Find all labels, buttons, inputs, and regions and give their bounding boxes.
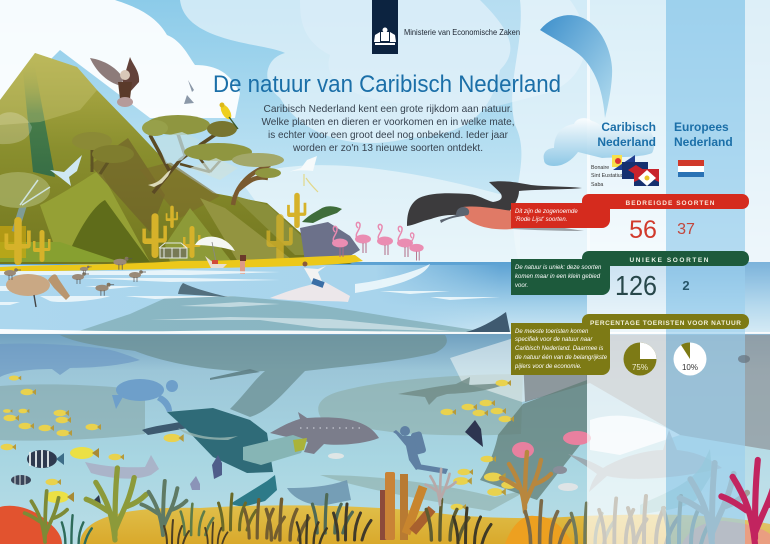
note text	[515, 209, 578, 223]
umbrella and sunbathers	[195, 237, 246, 274]
trees	[0, 115, 284, 232]
rijksoverheid logo	[372, 0, 398, 54]
flag: Netherlands	[678, 160, 704, 177]
whale shark silhouette	[0, 343, 140, 377]
reef sharks	[398, 377, 722, 492]
island labels	[591, 165, 624, 188]
eagle	[90, 57, 139, 107]
cloud near columns	[544, 118, 654, 166]
flag: Saba	[634, 169, 659, 186]
reef floor	[80, 505, 770, 544]
underwater background	[0, 333, 770, 544]
note text: De natuur is uniek: deze soorten	[515, 265, 602, 271]
title: De natuur van Caribisch Nederland	[213, 71, 561, 98]
stingray	[287, 480, 351, 506]
column veil: right margin	[745, 0, 770, 544]
note text: Dit zijn de zogenoemde	[515, 209, 578, 215]
whale above water	[70, 296, 500, 334]
note text: de natuur één van de belangrijkste	[515, 355, 608, 361]
wreck	[640, 449, 712, 515]
banner text: UNIEKE SOORTEN	[630, 257, 709, 264]
banner text: BEDREIGDE SOORTEN	[626, 200, 715, 207]
fish at right edge	[738, 355, 750, 363]
island labels: Saba	[591, 182, 603, 188]
cacti	[4, 193, 306, 265]
island labels: Sint Eustatius	[591, 173, 624, 179]
intro text: Caribisch Nederland kent een grote rijkdom aan natuur.	[264, 103, 512, 115]
clouds	[0, 0, 590, 265]
sponges	[380, 472, 435, 540]
spoonbill and waders	[4, 257, 146, 307]
yellow bird	[219, 102, 238, 129]
note text: pijlers voor de economie.	[514, 364, 582, 370]
flag: Bonaire	[612, 155, 635, 170]
column veil: Europees Nederland	[666, 0, 745, 544]
note text: komen maar in een klein gebied	[515, 274, 601, 280]
seaweed and corals	[25, 452, 747, 544]
big grey shape right	[450, 335, 770, 500]
number: 37: 37	[677, 221, 695, 238]
note text	[514, 329, 608, 370]
note text: De meeste toeristen komen	[515, 329, 589, 335]
pie chart: 10%: 10%	[682, 363, 698, 372]
note text: specifiek voor de natuur naar	[515, 337, 593, 343]
note text	[515, 265, 602, 289]
panel: unieke soorten	[511, 251, 749, 301]
striped fish	[11, 450, 102, 509]
sky background	[0, 0, 770, 265]
panel: bedreigde soorten	[511, 194, 749, 244]
small silver fish	[328, 453, 578, 491]
house	[159, 243, 187, 258]
beach	[0, 255, 363, 272]
number: 2: 2	[682, 278, 690, 293]
white waterline	[0, 329, 770, 334]
kite	[540, 15, 612, 118]
note text: voor.	[515, 283, 528, 289]
note text: Caribisch Nederland. Daarmee is	[515, 346, 603, 352]
orange mound	[505, 516, 573, 544]
hummingbird	[50, 155, 82, 186]
small birds	[184, 80, 202, 104]
column heading: Europees Nederland: Europees	[674, 120, 729, 134]
column heading: Europees Nederland: Nederland	[674, 135, 733, 149]
rocks	[300, 222, 360, 262]
intro text: is echter voor een groot deel nog onbekend. Ieder jaar	[268, 129, 508, 141]
diver	[393, 426, 448, 474]
tropicbird	[285, 156, 318, 192]
banner text: PERCENTAGE TOERISTEN VOOR NATUUR	[590, 320, 741, 327]
yellow fish school	[0, 375, 520, 510]
column heading: Caribisch Nederland: Nederland	[597, 135, 656, 149]
panel: percentage toeristen voor natuur	[511, 314, 749, 376]
pie chart: 75%	[624, 342, 656, 376]
whale underwater	[60, 335, 447, 417]
red coral	[0, 506, 62, 544]
pie chart: 75%: 75%	[632, 363, 648, 372]
number: 126: 126	[615, 270, 657, 301]
sea surface	[0, 262, 770, 334]
column heading: Caribisch Nederland	[597, 120, 656, 149]
note text: 'Rode Lijst' soorten.	[515, 217, 567, 223]
pale shark	[85, 455, 159, 479]
salmon mound	[682, 521, 770, 544]
column veil: Caribisch Nederland	[587, 0, 666, 544]
column heading: Europees Nederland	[674, 120, 733, 149]
big sea turtle	[142, 408, 307, 507]
iguana	[302, 206, 342, 223]
flamingos	[332, 222, 424, 260]
grey-green backdrop shape centre	[318, 374, 530, 511]
intro text: worden er zo'n 13 nieuwe soorten ontdekt.	[292, 142, 483, 154]
column heading: Caribisch Nederland: Caribisch	[601, 120, 656, 134]
icon: royal crest	[374, 28, 396, 45]
frigate bird	[407, 181, 584, 231]
lizard	[148, 170, 171, 187]
surfer	[270, 262, 350, 302]
shore water streaks	[0, 264, 500, 305]
angelfish	[190, 420, 483, 490]
blue turtle	[112, 379, 178, 412]
pie chart: 10%	[674, 342, 706, 376]
island labels: Bonaire	[591, 165, 609, 171]
grey-green backdrop shape left	[0, 384, 145, 441]
intro text	[262, 103, 514, 154]
ministry name: Ministerie van Economische Zaken	[404, 28, 520, 37]
pink coral	[721, 460, 770, 544]
pink fish	[512, 431, 591, 458]
flag: Sint Eustatius	[622, 162, 648, 179]
island mountains	[0, 53, 352, 264]
dolphin fins	[178, 283, 510, 332]
number: 56: 56	[629, 216, 657, 244]
intro text: Welke planten en dieren er voorkomen en in welke mate,	[262, 116, 514, 128]
spotted dolphin	[270, 412, 379, 454]
